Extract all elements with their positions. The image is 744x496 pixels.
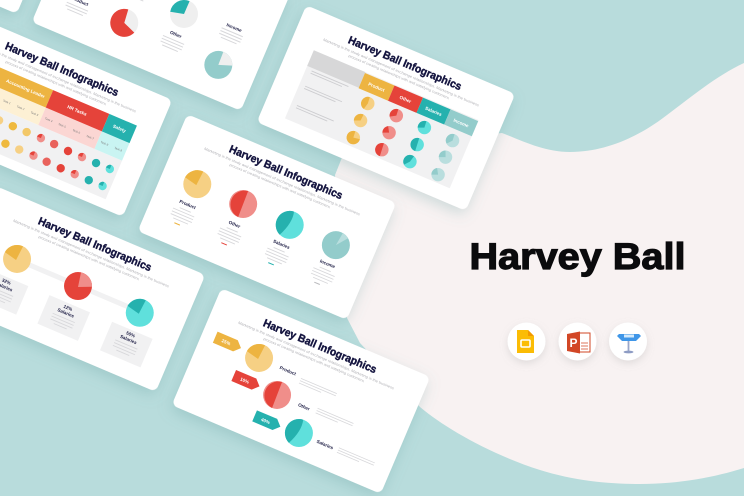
header and task rows: Accounting Leader [5,78,46,99]
subtitle: process of creating relationships with and satisfying customers. [229,163,331,209]
icon: powerpoint: P [569,336,578,350]
harvey balls: teal group [83,158,115,192]
main heading: Harvey Ball [470,236,686,277]
card: top pies [32,0,290,111]
card: tags and pies [172,288,430,494]
label: income: Income [226,22,243,33]
table header cells [307,50,479,136]
harvey balls: yellow group [0,115,32,155]
box: right [100,322,153,367]
pie: income [322,231,350,259]
labels: Other [228,220,241,229]
title: Harvey Ball Infographics [3,40,120,99]
label: product [277,365,339,399]
tag: 25% [213,332,243,354]
table body [285,50,479,188]
icon: google slides [508,322,546,360]
labels [179,199,336,269]
title: Harvey Ball Infographics [227,143,344,202]
header and task rows: Task 1 [2,98,12,106]
subtitle: process of creating relationships with and satisfying customers. [5,60,107,106]
tag: 40% [252,410,283,432]
box: middle: 12% [63,304,73,312]
background: blush wave [335,63,744,484]
text lines: red column [125,0,149,3]
card: table with harvey balls [257,5,515,211]
labels: Product [179,199,197,210]
subtitle: Marketing is the study and management of exchange relationships. Marketing is the business [322,38,480,108]
tag: 10% [231,370,262,392]
header and task rows: HR Tasks [67,104,88,117]
subtitle: Marketing is the study and management of exchange relationships. Marketing is the business [203,147,361,217]
pie: red [110,9,138,37]
row descriptions [296,71,349,124]
card: far top-left corner [0,0,66,14]
title: Harvey Ball Infographics [346,34,463,93]
subtitle: Marketing is the study and management of exchange relationships. Marketing is the business [12,219,170,289]
header and task rows: Task 3 [30,110,39,117]
pie: product [183,170,211,198]
table header cells: Product [367,81,386,93]
labels: Salaries [272,239,291,250]
pie: red [64,272,92,300]
pie: teal [170,0,198,28]
card: task table [0,11,172,217]
box: right: 50% [125,330,136,339]
box: middle [37,295,90,341]
labels: Income [319,258,336,269]
pie: salaries [276,211,304,239]
label: salaries [316,438,375,468]
harvey balls: red group [28,133,88,180]
card: timeline [0,186,205,392]
table header cells: Salaries [424,106,443,117]
table header cells: Other [399,95,412,104]
tag: 25%: 25% [221,338,231,346]
header and task rows: Task 8 [100,140,109,147]
pie: other [263,381,291,409]
text lines [169,205,336,285]
label: salaries: Salaries [316,439,334,451]
tag: 10%: 10% [239,377,250,385]
text lines: income [218,27,243,45]
icon: keynote [609,322,647,360]
header and task rows: Task 2 [16,104,26,111]
pie: income [204,51,232,79]
connector [16,257,141,314]
header and task rows: Task 5 [58,122,67,129]
title: Harvey Ball Infographics [36,215,153,274]
label: other: Other [169,30,183,39]
title: Harvey Ball Infographics [261,317,378,376]
subtitle: process of creating relationships with and satisfying customers. [348,54,450,100]
harvey balls: income [427,129,464,186]
box: right: Salaries [119,334,138,345]
header and task rows: Safety [112,124,127,134]
header and task rows: Task 6 [72,128,81,135]
subtitle: process of creating relationships with and satisfying customers. [263,337,365,383]
label: product: Product [279,365,297,377]
pie: other [229,190,257,218]
table header cells: Income [453,118,470,129]
pie: salaries [285,419,313,447]
colour bars [174,222,320,285]
header and task rows: Task 7 [86,134,95,141]
harvey balls: other [370,104,408,161]
header and task rows: Task 4 [44,116,54,123]
card: four harvey balls [138,114,396,320]
header and task rows: Task 9 [114,146,123,153]
text lines: product [64,2,88,17]
box: left: 32% [1,278,12,286]
tag: 40%: 40% [260,417,271,425]
subtitle: process of creating relationships with and satisfying customers. [38,235,140,281]
header and task rows [0,55,137,161]
box: left [0,269,28,315]
subtitle: Marketing is the study and management of exchange relationships. Marketing is the business [237,321,395,391]
pie: yellow [3,245,31,273]
label: other: Other [297,402,311,412]
box: middle: Salaries [57,307,75,319]
icon: powerpoint [558,322,596,360]
pie: teal [126,299,154,327]
text lines: other [159,35,184,53]
table body [0,90,122,199]
harvey balls: product [342,92,379,149]
harvey balls: salaries [398,116,436,173]
pie: product [245,344,273,372]
label: other [297,400,354,430]
